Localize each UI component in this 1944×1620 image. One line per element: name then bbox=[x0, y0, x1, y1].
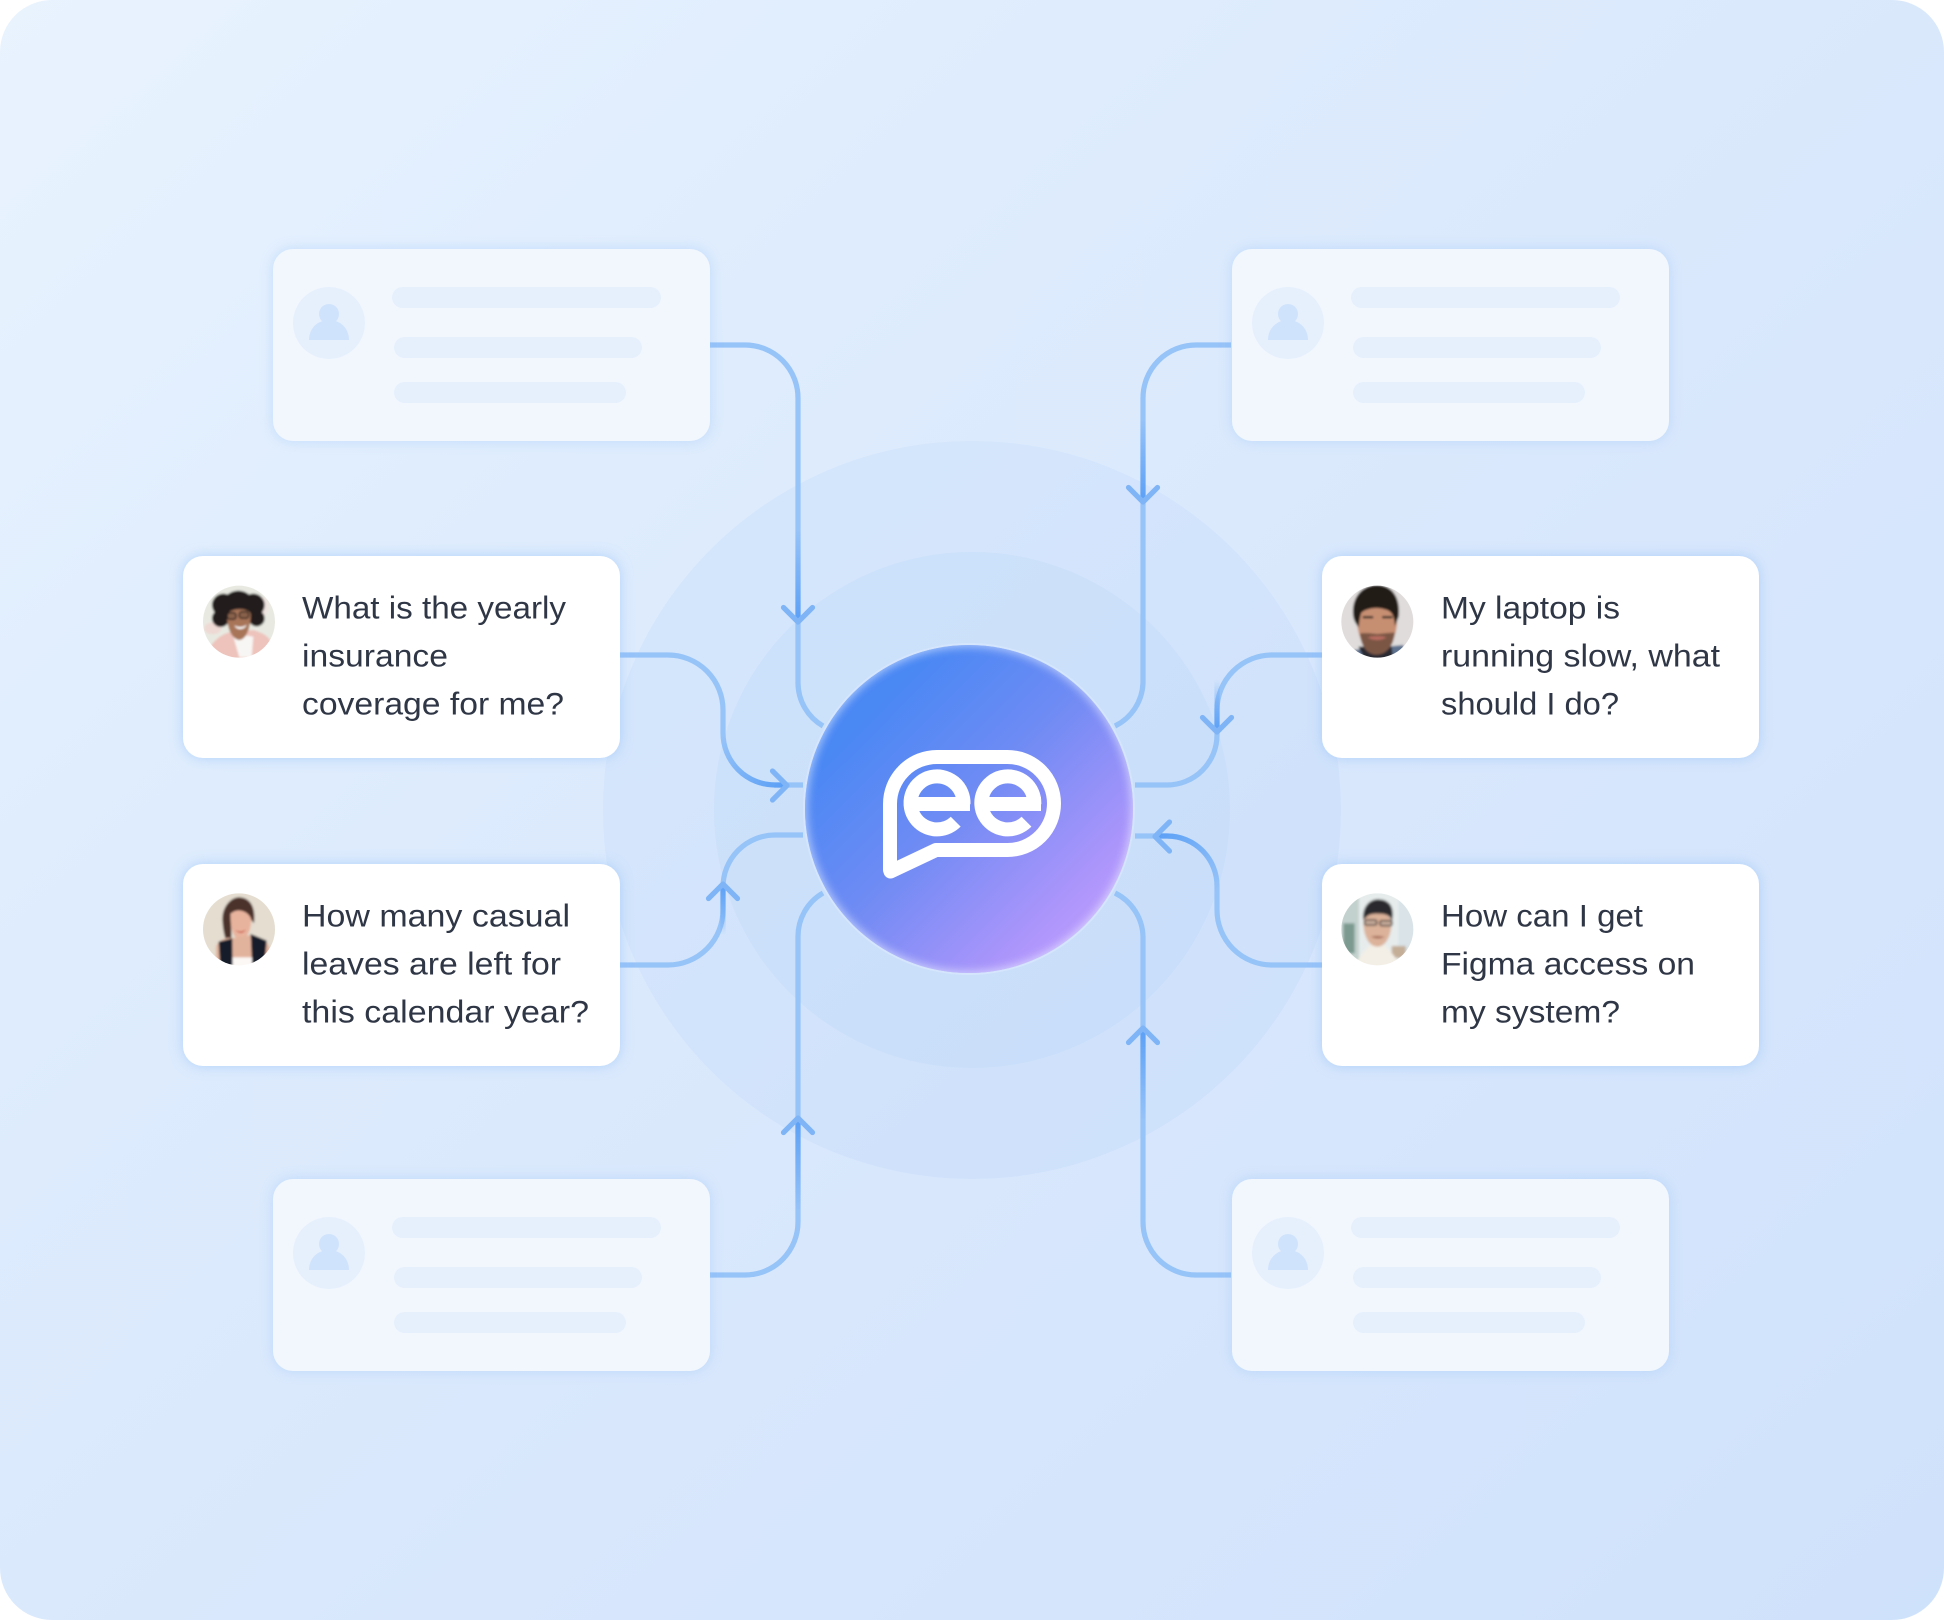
arrow: laptop card to hub bbox=[1135, 655, 1322, 785]
question card: insurance bbox=[183, 556, 620, 758]
speech bubble outline bbox=[890, 757, 1054, 872]
placeholder line 3 bbox=[394, 382, 626, 403]
arrow: top-left card to hub bbox=[710, 345, 823, 726]
question card: laptop bbox=[1322, 556, 1759, 758]
avatar: woman in dark vest bbox=[203, 893, 275, 965]
arrow: insurance card to hub bbox=[620, 655, 803, 800]
arrow: figma card to hub bbox=[1135, 822, 1322, 965]
question text: insurance bbox=[302, 638, 448, 674]
question text: should I do? bbox=[1441, 686, 1619, 722]
question text: What is the yearly bbox=[302, 590, 566, 626]
question text bbox=[1441, 590, 1720, 722]
question text: My laptop is bbox=[1441, 590, 1620, 626]
first letter mark bbox=[911, 776, 970, 829]
arrow: bottom-left card to hub bbox=[710, 893, 823, 1275]
avatar: man with stubble bbox=[1341, 586, 1414, 658]
placeholder avatar bbox=[293, 1217, 365, 1289]
placeholder avatar bbox=[1252, 1217, 1324, 1289]
placeholder line 1 bbox=[392, 287, 661, 308]
arrow: casual leaves card to hub bbox=[620, 835, 803, 965]
placeholder line 3 bbox=[1353, 382, 1585, 403]
question text bbox=[302, 898, 589, 1030]
question card: figma bbox=[1322, 864, 1759, 1066]
question text: this calendar year? bbox=[302, 994, 589, 1030]
question text: How many casual bbox=[302, 898, 570, 934]
placeholder card: bottom right bbox=[1232, 1179, 1669, 1371]
placeholder card: top left bbox=[273, 249, 710, 441]
second letter mark bbox=[981, 776, 1041, 829]
placeholder line 3 bbox=[1353, 1312, 1585, 1333]
inner halo ring bbox=[714, 552, 1230, 1068]
icon: chat bubble logo with double e bbox=[883, 750, 1061, 878]
placeholder line 2 bbox=[1353, 1267, 1601, 1288]
outer halo ring bbox=[603, 441, 1341, 1179]
central hub circle bbox=[805, 645, 1133, 973]
avatar: person with glasses bbox=[1341, 894, 1414, 966]
question text: Figma access on bbox=[1441, 946, 1695, 982]
placeholder card: bottom left bbox=[273, 1179, 710, 1371]
question text bbox=[1441, 898, 1695, 1030]
question text bbox=[302, 590, 566, 722]
placeholder line 1 bbox=[392, 1217, 661, 1238]
question text: running slow, what bbox=[1441, 638, 1720, 674]
placeholder line 3 bbox=[394, 1312, 626, 1333]
placeholder line 2 bbox=[1353, 337, 1601, 358]
question card: casual leaves bbox=[183, 864, 620, 1066]
placeholder line 1 bbox=[1351, 1217, 1620, 1238]
question text: my system? bbox=[1441, 994, 1620, 1030]
placeholder avatar bbox=[293, 287, 365, 359]
avatar: woman with curly hair bbox=[203, 586, 275, 658]
arrow: bottom-right card to hub bbox=[1115, 893, 1231, 1275]
question text: coverage for me? bbox=[302, 686, 564, 722]
placeholder line 2 bbox=[394, 337, 642, 358]
placeholder line 1 bbox=[1351, 287, 1620, 308]
question text: How can I get bbox=[1441, 898, 1643, 934]
placeholder line 2 bbox=[394, 1267, 642, 1288]
placeholder avatar bbox=[1252, 287, 1324, 359]
placeholder card: top right bbox=[1232, 249, 1669, 441]
question text: leaves are left for bbox=[302, 946, 561, 982]
arrow: top-right card to hub bbox=[1115, 345, 1231, 726]
